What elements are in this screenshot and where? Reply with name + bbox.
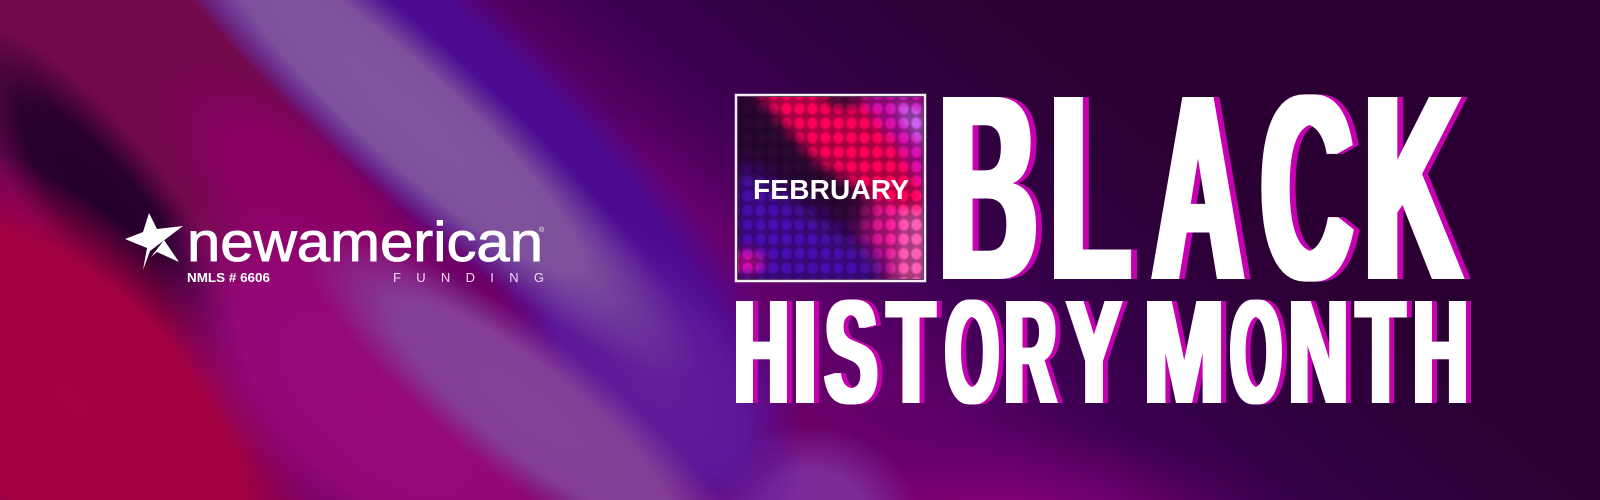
february tile [734,94,926,282]
tile label: FEBRUARY [753,174,909,205]
logo subline: FUNDING [393,270,544,285]
heading: history month: T [1356,269,1405,435]
heading: history month: H [1413,269,1468,435]
heading: history month: N [1288,269,1349,435]
NMLS number: NMLS # 6606 [187,270,270,285]
heading: history month: Y [1067,269,1121,435]
tile border [736,95,925,281]
heading: history month: M [1144,269,1225,435]
heading: history month: H [734,269,789,435]
heading: black [939,41,1461,336]
heading: history month: R [1004,269,1056,435]
registered mark: ® [539,226,545,234]
heading: black: K [1364,41,1461,336]
heading: black: L [1050,41,1130,336]
heading: history month [734,269,1468,435]
logo [125,210,545,285]
tile image [738,97,923,279]
heading: black: A [1153,41,1243,336]
icon: star [125,213,183,270]
heading: history month: T [887,269,935,435]
heading: black: B [939,41,1037,336]
heading: black: C [1261,41,1352,336]
heading: history month: S [825,269,878,435]
heading: history month: O [1230,269,1282,435]
logo wordmark: newamerican [187,210,543,273]
heading: history month: I [793,269,817,435]
heading: history month: O [945,269,999,435]
